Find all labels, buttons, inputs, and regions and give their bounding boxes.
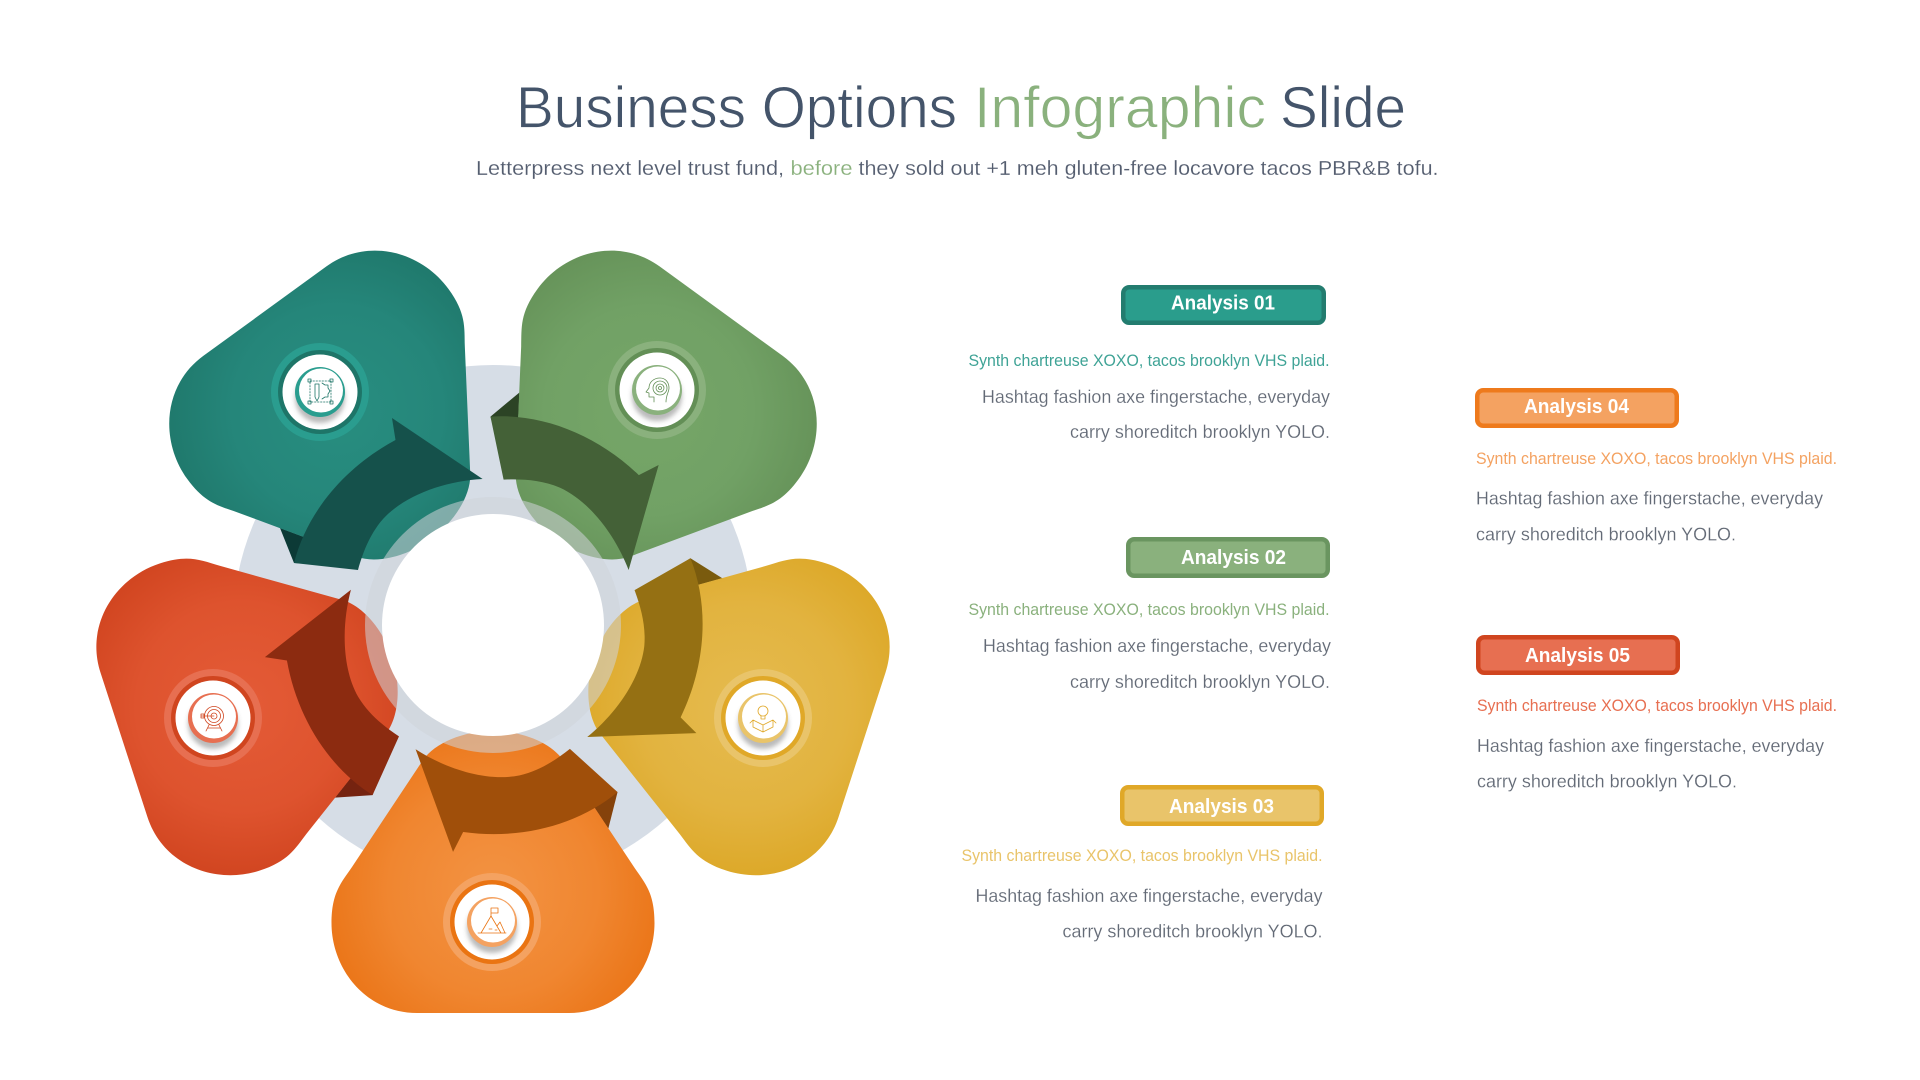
text block (962, 846, 1322, 942)
panel: analysis 04 (1476, 390, 1837, 544)
petal: yellow (544, 504, 912, 898)
text block (1477, 696, 1837, 792)
icon: mountain with flag (478, 908, 506, 933)
icon: pencil and gear (308, 379, 333, 404)
text block: carry shoreditch brooklyn YOLO. (1070, 422, 1330, 442)
badge (1123, 287, 1324, 323)
text block: Synth chartreuse XOXO, tacos brooklyn VHS plaid. (968, 600, 1330, 619)
arrow: yellow (534, 553, 776, 786)
text block (968, 600, 1331, 692)
background disc (233, 365, 753, 885)
arrow: teal (294, 418, 483, 570)
text block (968, 351, 1330, 442)
arrow: orange (380, 676, 622, 909)
badge: Analysis 04 (1524, 396, 1630, 418)
icon badge: teal (271, 343, 369, 441)
panel: analysis 01 (968, 287, 1330, 442)
text block: Synth chartreuse XOXO, tacos brooklyn VHS plaid. (962, 846, 1322, 865)
text block: Synth chartreuse XOXO, tacos brooklyn VHS plaid. (1477, 696, 1837, 715)
badge: Analysis 01 (1171, 292, 1275, 314)
title: Slide (1280, 76, 1406, 140)
arrow: red (235, 571, 437, 797)
text block (1476, 449, 1837, 544)
badge (1477, 390, 1677, 426)
text block: carry shoreditch brooklyn YOLO. (1062, 922, 1322, 942)
text block: Synth chartreuse XOXO, tacos brooklyn VHS plaid. (968, 351, 1330, 370)
icon: box with light bulb (750, 706, 776, 732)
badge: Analysis 05 (1525, 645, 1630, 667)
text block: Hashtag fashion axe fingerstache, everyday (1477, 736, 1824, 756)
badge (1122, 787, 1322, 824)
petal: green (425, 216, 852, 634)
icon: head with maze (646, 378, 669, 402)
icon badge: green (608, 341, 706, 439)
panel: analysis 02 (968, 539, 1331, 692)
text block: Synth chartreuse XOXO, tacos brooklyn VHS plaid. (1476, 449, 1837, 468)
text block: carry shoreditch brooklyn YOLO. (1477, 772, 1737, 792)
arrow: green (484, 372, 687, 598)
centre hole (382, 514, 604, 736)
text block: Hashtag fashion axe fingerstache, everyday (982, 387, 1330, 407)
text block: Hashtag fashion axe fingerstache, everyday (976, 886, 1322, 906)
icon: target with arrow (201, 706, 224, 731)
badge (1478, 637, 1678, 673)
text block: Hashtag fashion axe fingerstache, everyday (983, 636, 1331, 656)
subtitle (476, 158, 1438, 180)
title (516, 76, 1406, 140)
subtitle: Letterpress next level trust fund, (476, 158, 784, 180)
title: Infographic (974, 76, 1266, 140)
badge: Analysis 03 (1169, 796, 1274, 818)
subtitle: before (790, 158, 852, 180)
badge (1128, 539, 1328, 576)
subtitle: they sold out +1 meh gluten-free locavore tacos PBR&B tofu. (858, 158, 1438, 180)
petal: teal (134, 216, 561, 634)
text block: Hashtag fashion axe fingerstache, everyday (1476, 488, 1823, 508)
text block: carry shoreditch brooklyn YOLO. (1476, 524, 1736, 544)
badge: Analysis 02 (1181, 547, 1286, 569)
translucent inner ring (365, 497, 621, 753)
icon badge: red (164, 669, 262, 767)
icon badge: orange (443, 873, 541, 971)
icon badge: yellow (714, 669, 812, 767)
cycle diagram (74, 216, 912, 1013)
title: Business Options (516, 76, 957, 140)
text block: carry shoreditch brooklyn YOLO. (1070, 672, 1330, 692)
panel: analysis 05 (1477, 637, 1837, 792)
panel: analysis 03 (962, 787, 1322, 942)
petal: red (74, 504, 442, 898)
petal: orange (332, 731, 654, 1013)
